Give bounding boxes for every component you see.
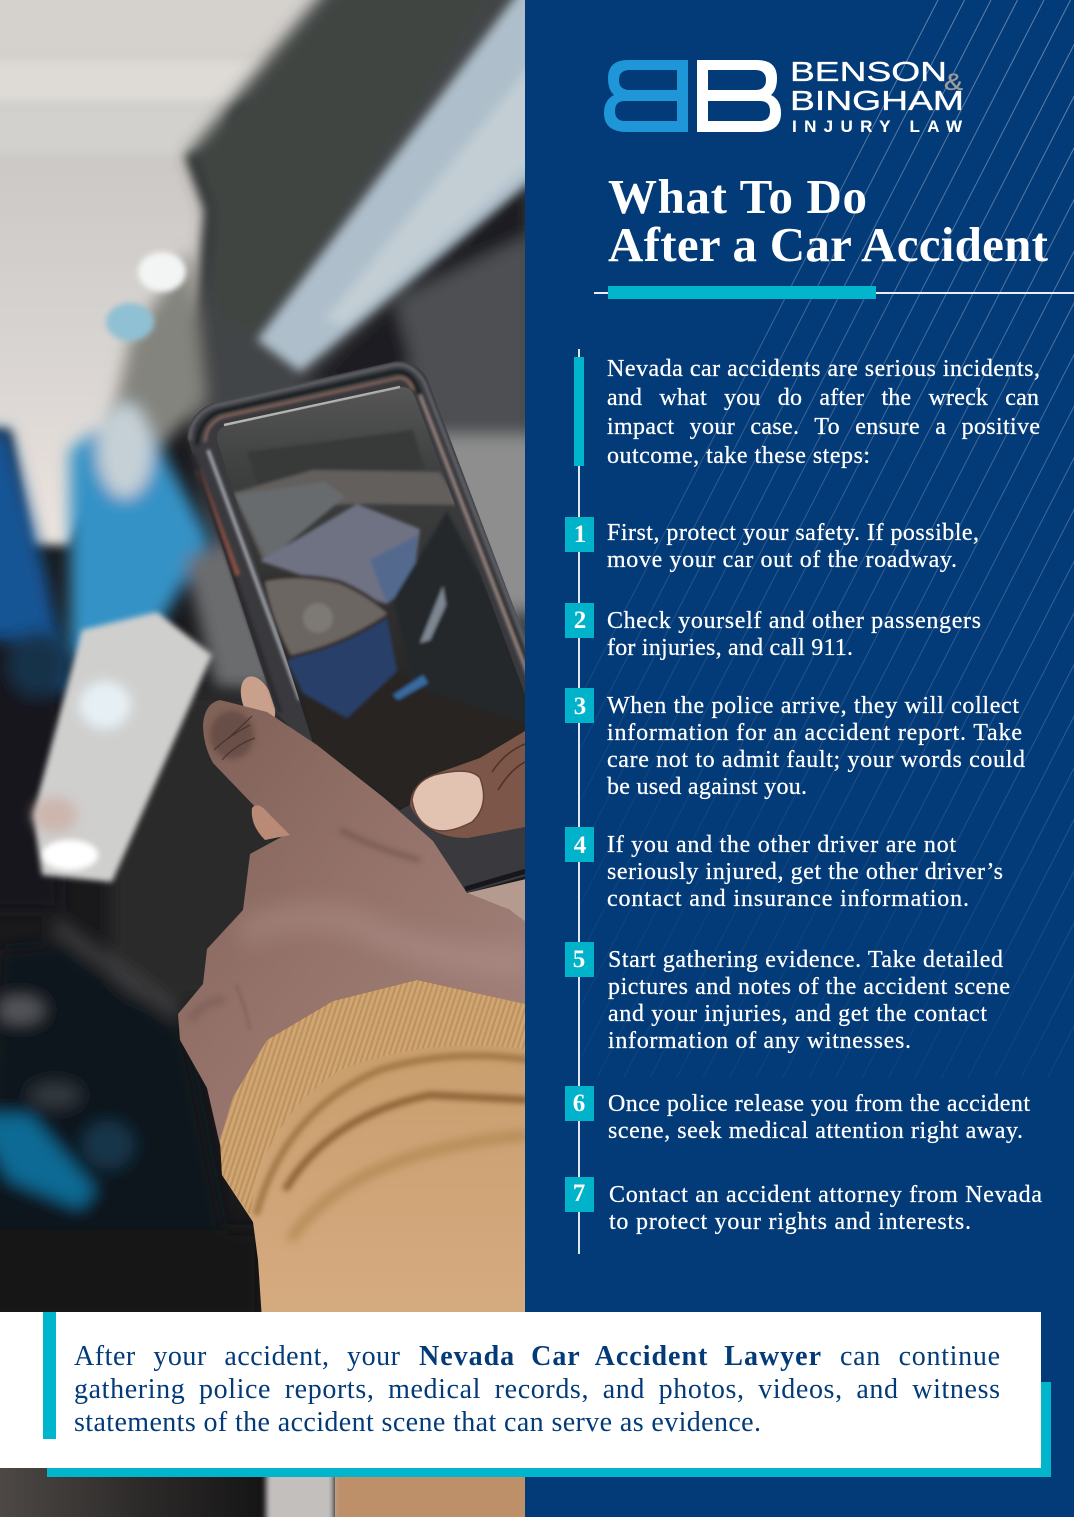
step 5 number badge: [565, 942, 594, 977]
step 7 number badge: 7: [573, 1180, 585, 1207]
step 4 number badge: [565, 827, 594, 862]
callout text: gathering police reports, medical records, and photos, videos, and witness: [74, 1374, 1000, 1405]
step 4 text: [607, 832, 1003, 912]
timeline rail: [578, 349, 580, 1254]
step 5 number badge: 5: [573, 946, 585, 973]
callout teal offset shadow: [47, 1382, 1051, 1477]
icon: white B: [697, 60, 781, 132]
blurred background: garage ceiling and wall: [0, 0, 334, 554]
navy content panel: [525, 0, 1074, 1517]
intro text: impact your case. To ensure a positive: [607, 414, 1040, 440]
step 4 number badge: 4: [574, 832, 587, 859]
step 6: [565, 1086, 1030, 1144]
step 1 text: [607, 520, 979, 573]
step 5 text: Start gathering evidence. Take detailed: [608, 947, 1003, 973]
step 1 text: move your car out of the roadway.: [607, 547, 957, 573]
step 1 text: First, protect your safety. If possible,: [607, 520, 979, 546]
blurred side mirror: [106, 252, 186, 341]
step 2 number badge: [565, 603, 594, 638]
photo: hands holding phone beside blurred cars: [0, 0, 525, 1517]
blurred lower dark car body: [0, 633, 280, 1320]
step 5 text: information of any witnesses.: [608, 1028, 911, 1054]
step 4 text: contact and insurance information.: [607, 886, 969, 912]
step 3 text: [607, 693, 1025, 800]
icon: blue mirrored B: [604, 60, 688, 132]
logo: Benson & Bingham Injury Law: [604, 56, 964, 136]
step 6 text: scene, seek medical attention right away.: [608, 1118, 1023, 1144]
callout text: Nevada Car Accident Lawyer: [419, 1341, 821, 1372]
step 4 text: If you and the other driver are not: [607, 832, 956, 858]
logo ampersand: &: [944, 69, 963, 96]
step 6 text: Once police release you from the accident: [608, 1091, 1030, 1117]
title divider with teal accent: [594, 286, 1074, 299]
step 7 text: [609, 1182, 1042, 1235]
step 5: [565, 942, 1010, 1054]
step 3: [565, 688, 1025, 800]
blurred blue car: [0, 400, 290, 700]
step 3 number badge: 3: [574, 693, 586, 720]
step 2 text: [607, 608, 981, 661]
right thumb with fingernail: [410, 728, 530, 838]
callout text: [74, 1341, 1000, 1438]
step 6 text: [608, 1091, 1030, 1144]
intro text: and what you do after the wreck can: [607, 385, 1039, 411]
step 6 number badge: [565, 1086, 594, 1121]
phone body and screen: [188, 361, 540, 893]
callout text: After your accident, your: [74, 1341, 401, 1372]
step 2 text: for injuries, and call 911.: [607, 635, 853, 661]
photo strip below the callout: [0, 1468, 525, 1517]
intro text: Nevada car accidents are serious incidents,: [607, 356, 1040, 382]
step 1 number badge: 1: [574, 521, 586, 548]
step 7: [565, 1177, 1042, 1235]
blurred windshield reflection: [257, 0, 535, 372]
step 3 text: be used against you.: [607, 774, 807, 800]
phone frame highlights: [190, 365, 530, 712]
callout: closing message: [0, 1312, 1051, 1477]
phone screen: [217, 386, 458, 810]
callout text: statements of the accident scene that can serve as evidence.: [74, 1407, 761, 1438]
left hand wrapped around phone: [178, 700, 530, 1145]
step 7 text: to protect your rights and interests.: [609, 1209, 971, 1235]
diagonal line texture: [581, 0, 1074, 1078]
step 3 number badge: [565, 688, 594, 723]
step 2 text: Check yourself and other passengers: [607, 608, 981, 634]
callout text: can continue: [840, 1341, 1000, 1372]
intro text: outcome, take these steps:: [607, 443, 870, 469]
step 3 text: care not to admit fault; your words could: [607, 747, 1025, 773]
step 2 number badge: 2: [574, 607, 586, 634]
hand fingertip behind phone: [240, 676, 276, 718]
step 3 text: information for an accident report. Take: [607, 720, 1022, 746]
intro text: [607, 356, 1040, 469]
step 7 text: Contact an accident attorney from Nevada: [609, 1182, 1042, 1208]
step 4 text: seriously injured, get the other driver’s: [607, 859, 1003, 885]
step 3 text: When the police arrive, they will collect: [607, 693, 1019, 719]
reflected car on screen: [217, 387, 525, 806]
step 5 text: and your injuries, and get the contact: [608, 1001, 987, 1027]
step 2: [565, 603, 981, 661]
logo tagline: INJURY LAW: [792, 117, 963, 136]
callout white box: [0, 1312, 1041, 1468]
blurred white car panel: [33, 612, 212, 882]
mustard sweater sleeve: [220, 980, 530, 1320]
base dark fill: [0, 150, 525, 1517]
step 1 number badge: [565, 517, 594, 552]
step 5 text: [608, 947, 1010, 1054]
title: What To Do: [608, 169, 867, 224]
knitted sleeve cuff: [220, 980, 530, 1240]
step 4: [565, 827, 1003, 912]
intro accent bar: [574, 357, 584, 466]
logo name: Bingham: BINGHAM: [790, 85, 964, 116]
hand shading: [190, 711, 530, 1030]
step 1: [565, 517, 979, 573]
callout teal side bar: [43, 1312, 56, 1439]
step 5 text: pictures and notes of the accident scene: [608, 974, 1010, 1000]
step 7 number badge: [565, 1177, 594, 1212]
title: [608, 169, 1049, 272]
step 6 number badge: 6: [573, 1090, 585, 1117]
logo name: Benson: BENSON: [790, 56, 947, 87]
blurred dark car with windshield reflection: [106, 0, 525, 725]
title: After a Car Accident: [608, 217, 1049, 272]
